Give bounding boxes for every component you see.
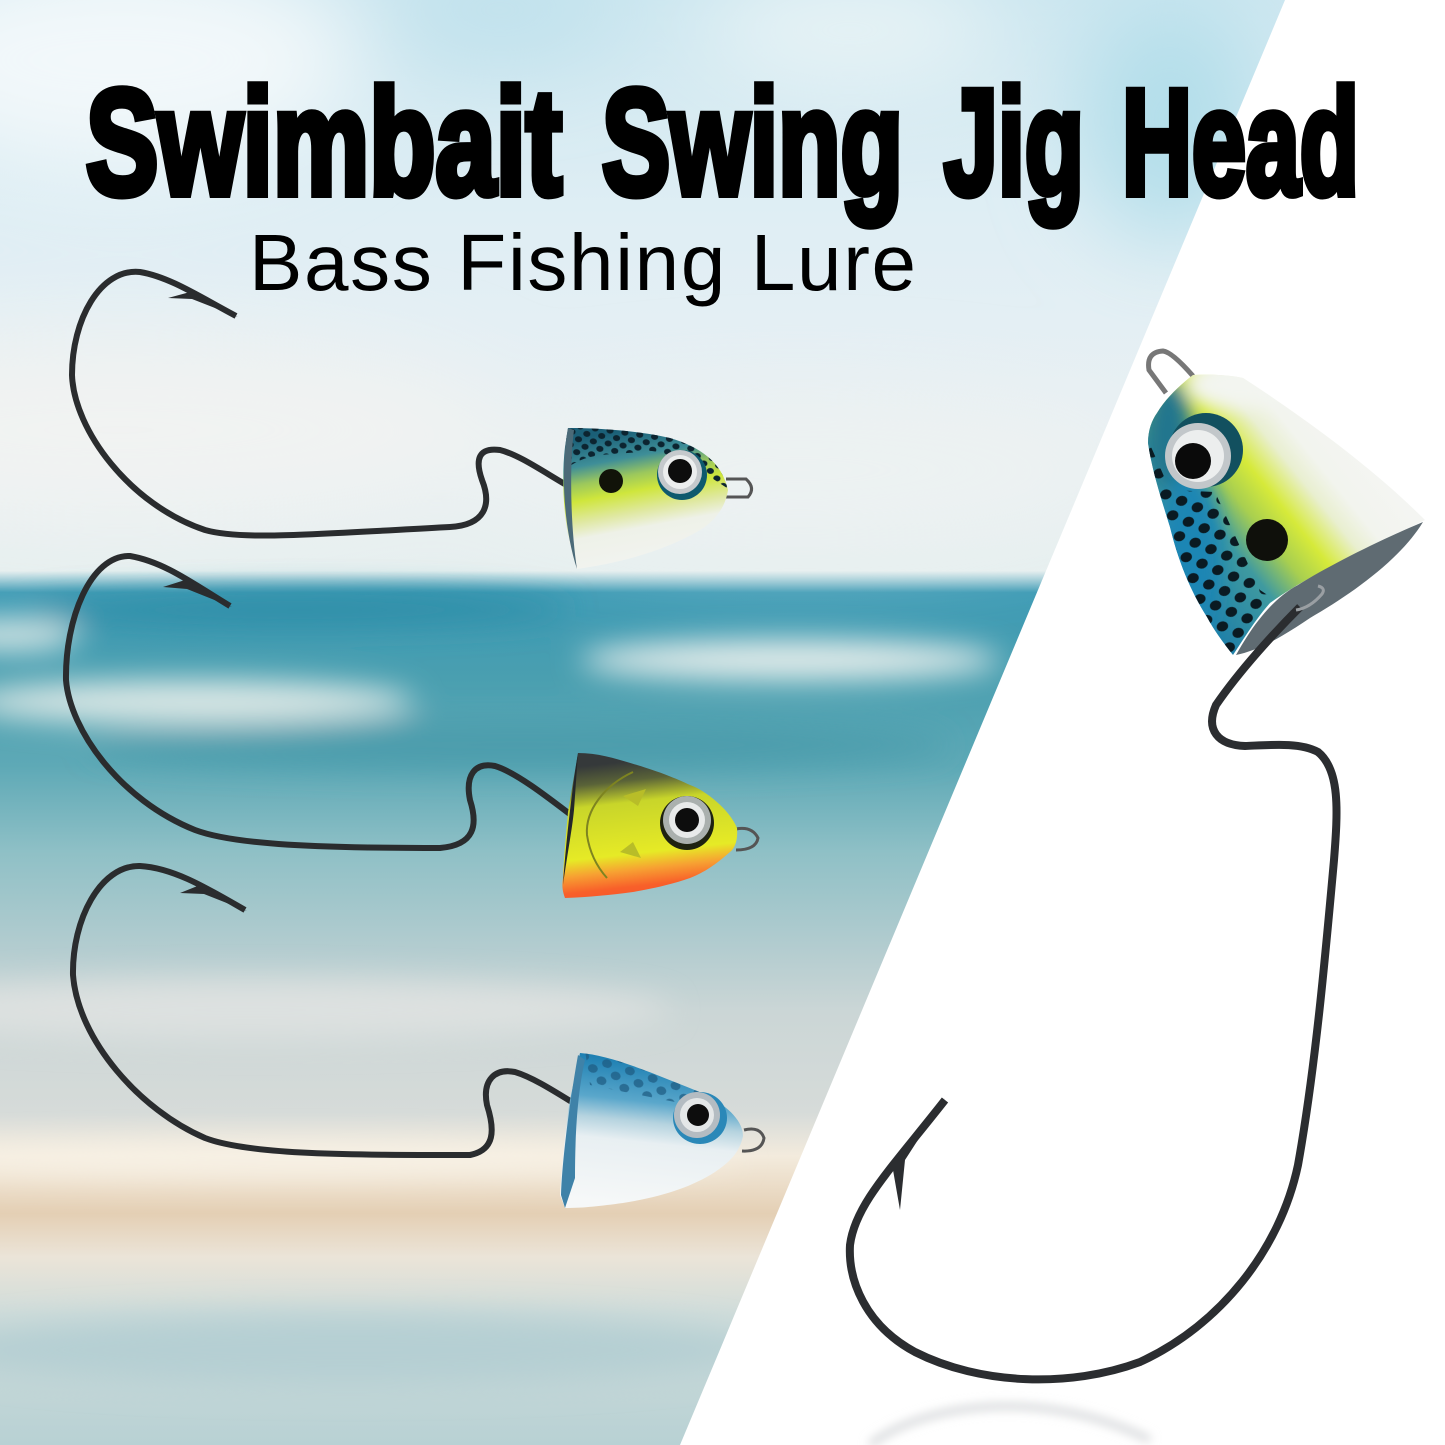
scale pattern [586, 1054, 700, 1102]
head [563, 428, 728, 569]
waves [0, 594, 1000, 1386]
head [562, 753, 737, 898]
head [1148, 375, 1425, 655]
title [86, 58, 1359, 226]
wire eyelet inside head [1296, 586, 1323, 610]
hook reflection [870, 1406, 1150, 1445]
scale pattern [565, 428, 730, 490]
eye [660, 796, 714, 850]
line tie [742, 1129, 764, 1151]
head opening [1236, 522, 1423, 655]
jig head 2: chartreuse and orange [66, 556, 758, 898]
gill line [587, 772, 633, 878]
line tie [1149, 351, 1193, 393]
gill dot [1246, 519, 1288, 561]
head opening [563, 753, 578, 885]
subtitle: Bass Fishing Lure [249, 218, 916, 307]
barb [163, 580, 232, 607]
barb [180, 885, 247, 911]
title: Jig [944, 58, 1084, 226]
hook point barb [893, 1098, 945, 1210]
eye [673, 1092, 727, 1144]
sky clouds [0, 0, 1260, 540]
head opening [564, 428, 577, 569]
hook wire [73, 866, 585, 1155]
eye [657, 450, 707, 500]
line tie [726, 479, 752, 497]
title: Swimbait [86, 58, 562, 226]
head opening [561, 1055, 585, 1208]
jig head 1: green and teal [72, 272, 752, 569]
head [560, 1053, 743, 1208]
line tie [736, 828, 758, 850]
hook wire [850, 607, 1337, 1379]
gill dot [599, 469, 623, 493]
jig head 3: blue and white [73, 866, 764, 1208]
scale pattern [1149, 448, 1266, 652]
hook wire [72, 272, 575, 536]
head colour shading [1148, 374, 1260, 636]
hook wire [66, 556, 575, 848]
eye [1165, 413, 1243, 489]
fin marks [620, 789, 646, 858]
large jig head on white [850, 351, 1425, 1379]
barb [168, 292, 238, 317]
title: Swing [602, 58, 903, 226]
